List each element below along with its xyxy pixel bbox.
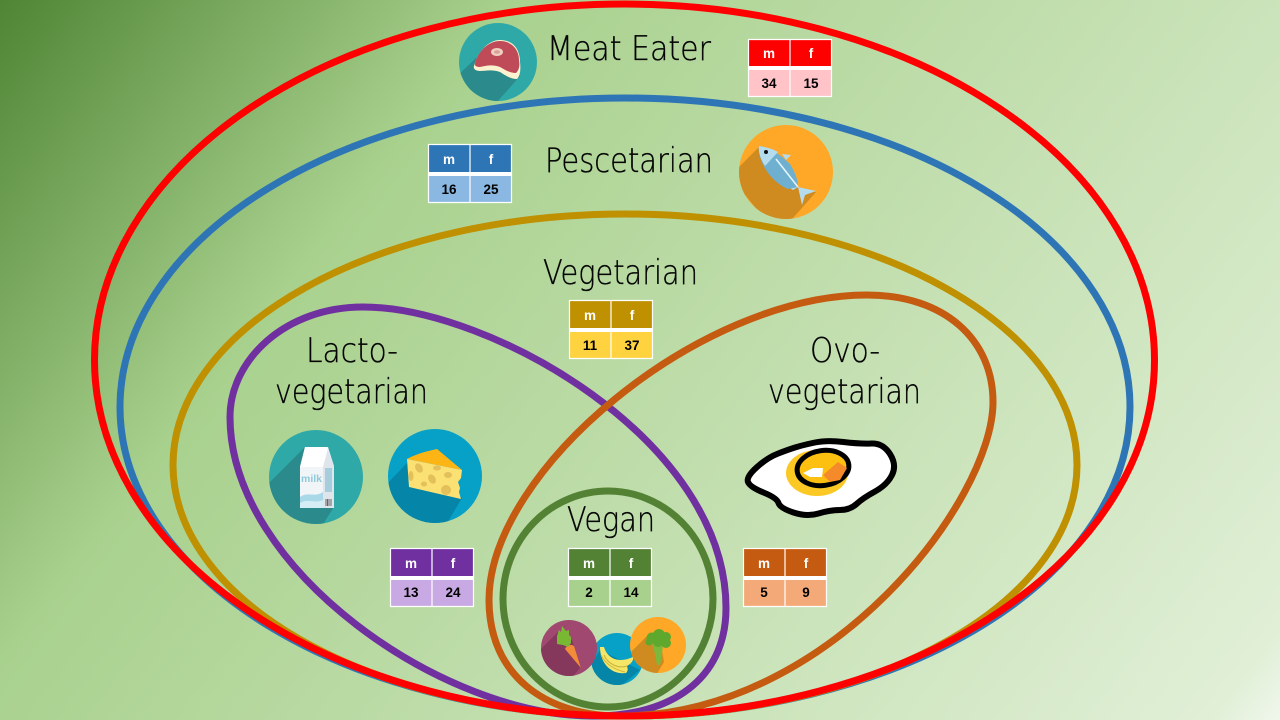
heading: Lacto-vegetarian: vegetarian [275,372,428,412]
table: lacto-vegetarian counts: 24 [445,585,461,600]
table: vegetarian counts: 11 [583,338,598,353]
table: ovo-vegetarian counts: 5 [760,585,768,600]
table: ovo-vegetarian counts: m [758,556,770,571]
table: lacto-vegetarian counts: m [405,556,417,571]
table: vegetarian counts [569,300,653,359]
heading: Meat Eater: Meat Eater [547,29,711,69]
table: lacto-vegetarian counts [390,548,474,607]
icon: fried egg [748,441,894,515]
table: pescetarian counts: 25 [483,182,499,197]
table: vegan counts [568,548,652,607]
heading: Vegan: Vegan [567,500,655,540]
table: meat eater counts: 34 [761,76,777,91]
set outline: lacto-vegetarian [230,307,726,716]
table: vegetarian counts: f [630,308,635,323]
table: lacto-vegetarian counts: 13 [403,585,419,600]
table: meat eater counts [748,39,832,97]
table: meat eater counts: m [763,46,775,61]
icon: broccoli [630,617,686,673]
table: vegan counts: m [583,556,595,571]
set outline: pescetarian [120,98,1130,716]
icon: milk carton [269,430,363,524]
table: ovo-vegetarian counts: f [804,556,809,571]
table: vegan counts: 2 [585,585,593,600]
icon: milk carton: milk [301,473,322,485]
table: vegetarian counts: 37 [624,338,640,353]
icon: carrot [541,620,597,676]
heading: Ovo-vegetarian [768,331,921,412]
heading: Lacto-vegetarian: Lacto- [306,331,398,371]
heading: Vegetarian: Vegetarian [543,253,698,293]
table: pescetarian counts: 16 [441,182,457,197]
heading: Pescetarian: Pescetarian [545,141,713,181]
set outline: vegetarian [173,214,1077,716]
table: vegan counts: f [629,556,634,571]
set outline: vegan [503,491,713,707]
set outline: ovo-vegetarian [489,295,993,716]
icon: meat steak [459,23,537,101]
table: pescetarian counts: m [443,152,455,167]
table: ovo-vegetarian counts: 9 [802,585,810,600]
heading: Ovo-vegetarian: Ovo- [810,331,880,371]
table: meat eater counts: 15 [803,76,819,91]
heading: Lacto-vegetarian [275,331,428,412]
table: meat eater counts: f [809,46,814,61]
icon: banana [592,633,642,685]
table: ovo-vegetarian counts [743,548,827,607]
table: pescetarian counts [428,144,512,203]
table: vegan counts: 14 [623,585,639,600]
heading: Ovo-vegetarian: vegetarian [768,372,921,412]
table: vegetarian counts: m [584,308,596,323]
table: pescetarian counts: f [489,152,494,167]
table: lacto-vegetarian counts: f [451,556,456,571]
icon: cheese wedge [388,429,482,523]
icon: fish [739,125,833,219]
